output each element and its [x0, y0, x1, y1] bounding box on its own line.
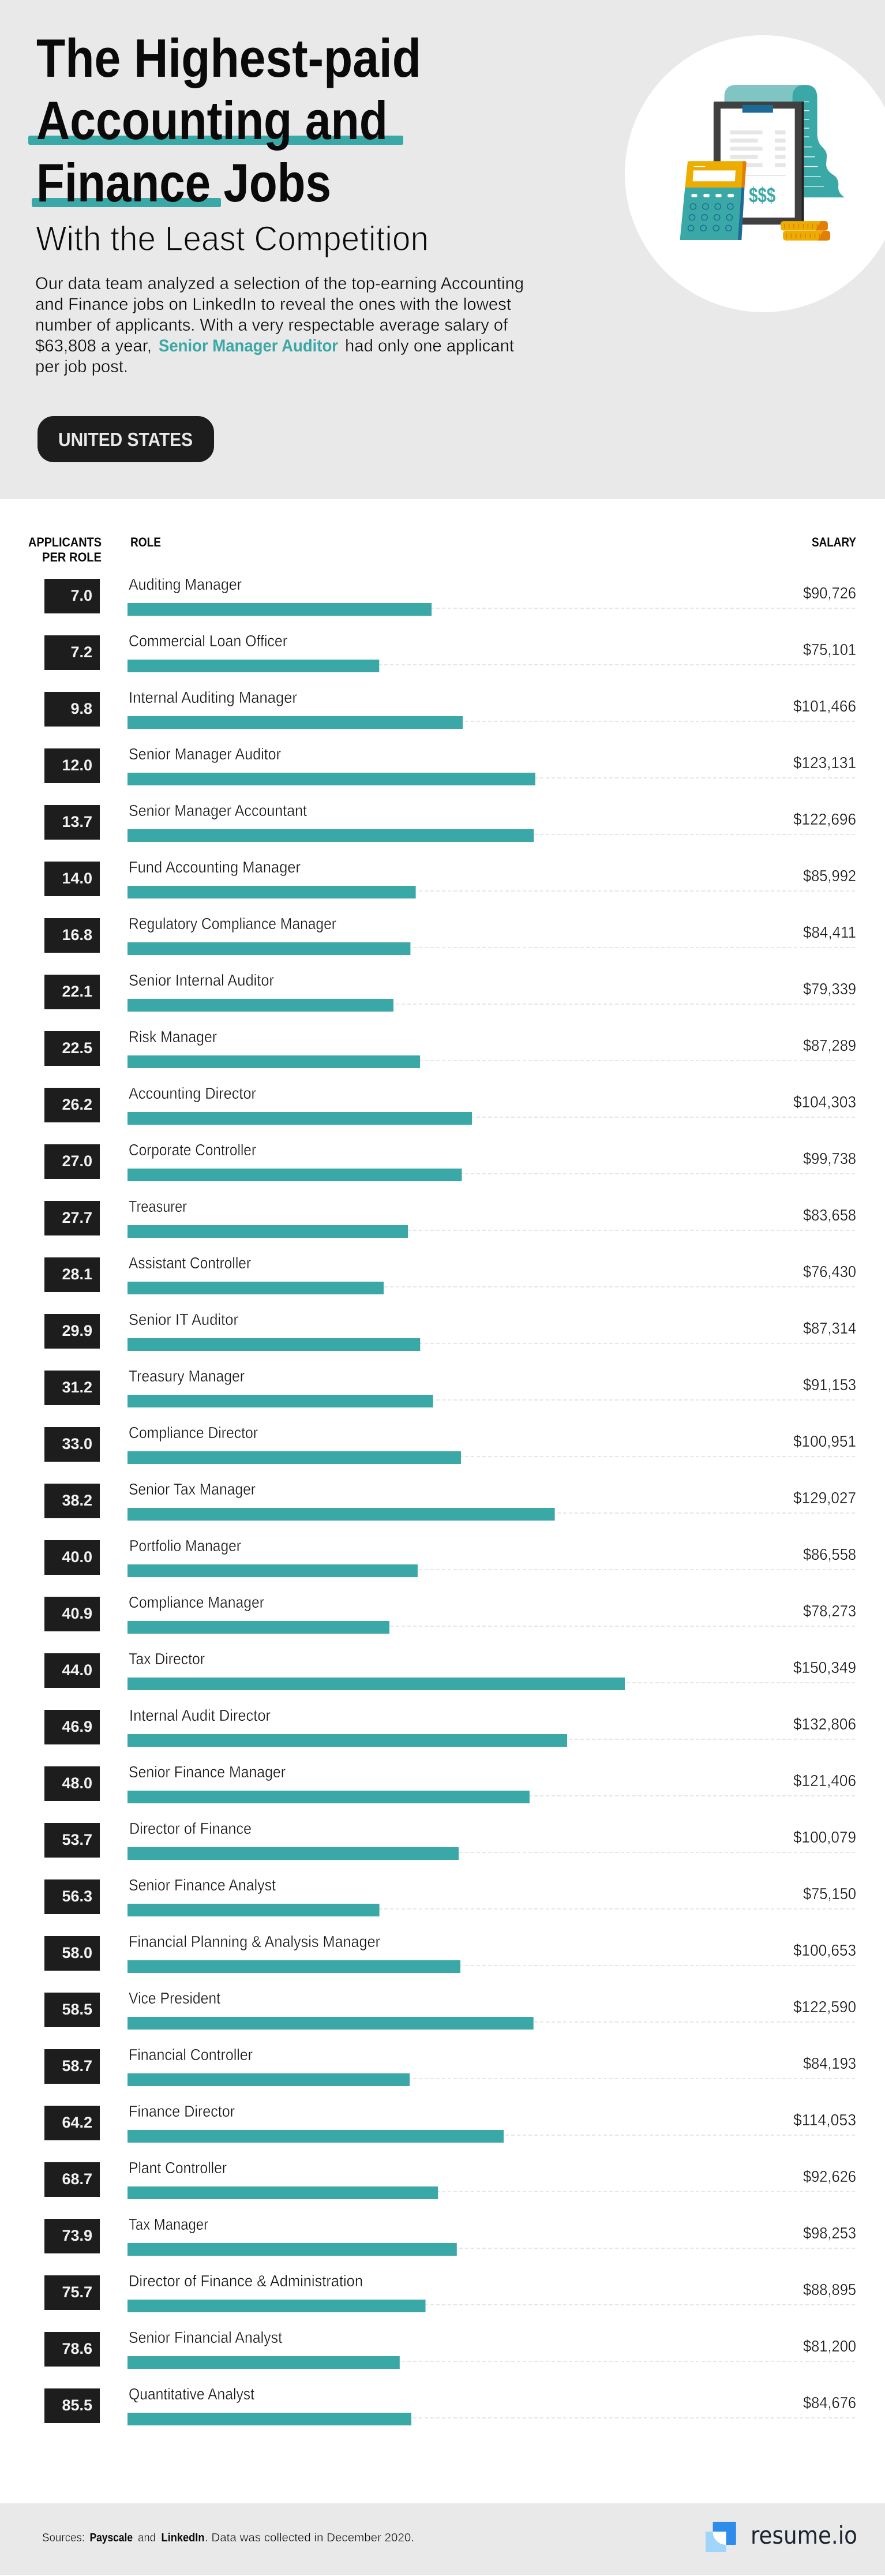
table column headers	[28, 535, 856, 564]
row: Director of Finance & Administration: Director of Finance & Administration	[129, 2272, 363, 2290]
row: Senior Manager Accountant: $122,696	[793, 810, 856, 828]
row: Compliance Manager	[44, 1593, 856, 1634]
sources note: Payscale	[90, 2532, 133, 2544]
table column headers: ROLE	[130, 535, 161, 549]
intro paragraph: and Finance jobs on LinkedIn to reveal the ones with the lowest	[35, 295, 512, 314]
row: Financial Planning & Analysis Manager	[44, 1933, 856, 1973]
row: Regulatory Compliance Manager: 16.8	[62, 926, 92, 943]
logo wordmark: resume.io	[751, 2521, 857, 2549]
row: Financial Planning & Analysis Manager: $100,653	[793, 1941, 856, 1959]
row: Senior Manager Accountant: Senior Manager Accountant	[129, 802, 307, 819]
row: Compliance Director: $100,951	[793, 1432, 856, 1450]
row: Senior IT Auditor: 29.9	[62, 1322, 92, 1339]
row: Treasurer	[44, 1197, 856, 1238]
row: Finance Director: 64.2	[62, 2114, 92, 2131]
row: Tax Director: 44.0	[62, 1661, 92, 1679]
row: Senior Internal Auditor: Senior Internal Auditor	[129, 971, 274, 989]
row: Commercial Loan Officer: Commercial Loan Officer	[129, 632, 287, 650]
sources note: Sources:	[42, 2532, 85, 2544]
table column headers: PER ROLE	[42, 550, 102, 564]
row: Senior Manager Auditor: 12.0	[62, 757, 92, 774]
dashed row separators	[130, 608, 857, 2418]
row: Senior IT Auditor: $87,314	[803, 1319, 856, 1337]
row: Corporate Controller: $99,738	[803, 1150, 856, 1167]
row: Senior Finance Analyst	[44, 1876, 856, 1916]
row: Tax Manager: 73.9	[62, 2227, 92, 2244]
row: Senior Internal Auditor: $79,339	[803, 980, 856, 998]
intro paragraph: Our data team analyzed a selection of the top-earning Accounting	[35, 274, 524, 293]
row: Senior IT Auditor	[44, 1311, 856, 1351]
row: Accounting Director: 26.2	[62, 1096, 92, 1113]
row: Financial Controller: $84,193	[803, 2054, 856, 2072]
row: Accounting Director: Accounting Director	[129, 1084, 256, 1102]
row: Senior Tax Manager: Senior Tax Manager	[129, 1480, 256, 1498]
sources note: LinkedIn	[162, 2532, 204, 2544]
sources note	[42, 2532, 414, 2544]
row: Vice President: 58.5	[62, 2001, 92, 2018]
row: Tax Manager	[44, 2215, 856, 2256]
icon: clipboard, receipt, calculator and coins	[680, 85, 845, 241]
row: Tax Director	[44, 1650, 856, 1690]
row: Treasury Manager: 31.2	[62, 1379, 92, 1396]
row: Senior Manager Auditor: $123,131	[793, 754, 856, 772]
row: Tax Director: Tax Director	[129, 1650, 205, 1668]
table column headers: SALARY	[812, 535, 856, 549]
intro paragraph: Senior Manager Auditor	[159, 336, 338, 355]
row: Tax Manager: Tax Manager	[129, 2215, 208, 2233]
row: Portfolio Manager: 40.0	[62, 1548, 92, 1566]
row: Internal Audit Director	[44, 1706, 856, 1747]
row: Treasury Manager	[44, 1367, 856, 1407]
title	[36, 28, 421, 213]
row: Compliance Manager: Compliance Manager	[129, 1593, 264, 1611]
row: Corporate Controller: 27.0	[62, 1152, 92, 1170]
row: Regulatory Compliance Manager: $84,411	[803, 923, 856, 941]
row: Director of Finance: 53.7	[62, 1831, 92, 1848]
row: Compliance Manager: $78,273	[803, 1602, 856, 1620]
row: Senior Manager Accountant: 13.7	[62, 813, 92, 830]
row: Director of Finance & Administration	[44, 2272, 856, 2312]
row: Regulatory Compliance Manager	[44, 915, 856, 955]
row: Accounting Director	[44, 1084, 856, 1125]
row: Assistant Controller: $76,430	[803, 1263, 856, 1280]
row: Internal Auditing Manager	[44, 688, 856, 729]
header panel	[0, 0, 885, 499]
table column headers: APPLICANTS	[28, 535, 102, 549]
row: Treasurer: Treasurer	[129, 1197, 187, 1215]
row: Plant Controller: 68.7	[62, 2170, 92, 2188]
row: Internal Audit Director: Internal Audit Director	[129, 1706, 271, 1724]
row: Financial Controller: Financial Controller	[129, 2046, 253, 2064]
row: Fund Accounting Manager: $85,992	[803, 867, 856, 885]
title: Finance Jobs	[36, 152, 331, 213]
row: Senior Tax Manager: 38.2	[62, 1492, 92, 1509]
row: Auditing Manager	[44, 575, 856, 616]
row: Internal Auditing Manager: 9.8	[70, 700, 92, 717]
row: Portfolio Manager: $86,558	[803, 1545, 856, 1563]
row: Risk Manager: $87,289	[803, 1036, 856, 1054]
row: Risk Manager: 22.5	[62, 1039, 92, 1057]
row: Quantitative Analyst	[44, 2385, 856, 2425]
row: Senior Internal Auditor: 22.1	[62, 983, 92, 1000]
row: Risk Manager: Risk Manager	[129, 1028, 217, 1046]
row: Director of Finance: Director of Finance	[129, 1819, 252, 1837]
row: Accounting Director: $104,303	[793, 1093, 856, 1111]
row: Senior Finance Analyst: 56.3	[62, 1888, 92, 1905]
row: Director of Finance: $100,079	[793, 1828, 856, 1846]
row: Portfolio Manager	[44, 1537, 856, 1577]
row: Senior Financial Analyst: $81,200	[803, 2337, 856, 2355]
intro paragraph: $63,808 a year,	[35, 336, 152, 355]
row: Finance Director	[44, 2102, 856, 2143]
row: Senior IT Auditor: Senior IT Auditor	[129, 1311, 238, 1328]
row: Plant Controller: Plant Controller	[129, 2159, 227, 2177]
row: Financial Controller: 58.7	[62, 2057, 92, 2075]
row: Senior Financial Analyst	[44, 2328, 856, 2369]
country pill: United States	[38, 416, 214, 462]
row: Financial Planning & Analysis Manager: 58.0	[62, 1944, 92, 1961]
row: Senior Finance Manager	[44, 1763, 856, 1803]
row: Treasury Manager: Treasury Manager	[129, 1367, 245, 1385]
row: Director of Finance & Administration: 75.7	[62, 2283, 92, 2301]
icon: clipboard, receipt, calculator and coins: $$$	[749, 184, 775, 207]
row: Assistant Controller	[44, 1254, 856, 1294]
row: Senior Internal Auditor	[44, 971, 856, 1012]
row: Senior Finance Manager: Senior Finance Manager	[129, 1763, 286, 1781]
row: Auditing Manager: 7.0	[70, 587, 92, 604]
row: Fund Accounting Manager	[44, 858, 856, 898]
row: Senior Tax Manager: $129,027	[793, 1489, 856, 1507]
icon: white circle	[625, 35, 885, 312]
row: Internal Auditing Manager: $101,466	[793, 697, 856, 715]
row: Director of Finance & Administration: $88,895	[803, 2281, 856, 2298]
sources note: . Data was collected in December 2020.	[205, 2532, 414, 2544]
row: Tax Director: $150,349	[793, 1658, 856, 1676]
row: Financial Controller	[44, 2046, 856, 2086]
row: Senior Financial Analyst: Senior Financial Analyst	[129, 2328, 282, 2346]
row: Corporate Controller	[44, 1141, 856, 1181]
row: Commercial Loan Officer	[44, 632, 856, 672]
row: Compliance Director: Compliance Director	[129, 1424, 258, 1441]
row: Finance Director: $114,053	[793, 2111, 856, 2129]
country pill: United States: UNITED STATES	[58, 429, 193, 450]
intro paragraph: number of applicants. With a very respectable average salary of	[35, 316, 508, 335]
intro paragraph: had only one applicant	[345, 336, 515, 355]
subtitle: With the Least Competition	[36, 219, 429, 258]
row: Senior Manager Accountant	[44, 802, 856, 842]
row: Commercial Loan Officer: 7.2	[70, 643, 92, 661]
title: Accounting and	[36, 90, 388, 151]
row: Assistant Controller: 28.1	[62, 1265, 92, 1283]
row: Plant Controller: $92,626	[803, 2167, 856, 2185]
intro paragraph	[35, 274, 524, 376]
row: Vice President: Vice President	[129, 1989, 220, 2007]
row: Quantitative Analyst: $84,676	[803, 2394, 856, 2412]
footer panel	[0, 2503, 885, 2575]
row: Fund Accounting Manager: Fund Accounting Manager	[129, 858, 301, 876]
row: Regulatory Compliance Manager: Regulatory Compliance Manager	[129, 915, 336, 933]
row: Compliance Manager: 40.9	[62, 1605, 92, 1622]
row: Finance Director: Finance Director	[129, 2102, 235, 2120]
highlight: title underlines	[28, 136, 403, 207]
row: Quantitative Analyst: 85.5	[62, 2397, 92, 2414]
row: Fund Accounting Manager: 14.0	[62, 870, 92, 887]
row: Corporate Controller: Corporate Controller	[129, 1141, 256, 1159]
row: Senior Manager Auditor: Senior Manager Auditor	[129, 745, 281, 763]
intro paragraph: per job post.	[35, 357, 128, 376]
row: Auditing Manager: $90,726	[803, 584, 856, 602]
row: Plant Controller	[44, 2159, 856, 2199]
sources note: and	[138, 2532, 156, 2544]
row: Auditing Manager: Auditing Manager	[129, 575, 242, 593]
row: Compliance Director	[44, 1424, 856, 1464]
row: Quantitative Analyst: Quantitative Analyst	[129, 2385, 254, 2403]
row: Senior Finance Analyst: Senior Finance Analyst	[129, 1876, 276, 1894]
row: Director of Finance	[44, 1819, 856, 1860]
row: Treasury Manager: $91,153	[803, 1376, 856, 1394]
row: Treasurer: $83,658	[803, 1206, 856, 1224]
row: Risk Manager	[44, 1028, 856, 1068]
row: Financial Planning & Analysis Manager: Financial Planning & Analysis Manager	[129, 1933, 380, 1950]
row: Treasurer: 27.7	[62, 1209, 92, 1226]
icon: resume.io logo mark	[706, 2522, 736, 2552]
title: The Highest-paid	[36, 28, 421, 88]
row: Senior Tax Manager	[44, 1480, 856, 1521]
row: Portfolio Manager: Portfolio Manager	[129, 1537, 241, 1555]
row: Vice President	[44, 1989, 856, 2030]
row: Commercial Loan Officer: $75,101	[803, 641, 856, 658]
row: Senior Financial Analyst: 78.6	[62, 2340, 92, 2357]
row: Internal Audit Director: $132,806	[793, 1715, 856, 1733]
row: Compliance Director: 33.0	[62, 1435, 92, 1452]
row: Assistant Controller: Assistant Controller	[129, 1254, 251, 1272]
row: Internal Audit Director: 46.9	[62, 1718, 92, 1735]
row: Senior Finance Manager: $121,406	[793, 1772, 856, 1789]
row: Tax Manager: $98,253	[803, 2224, 856, 2242]
row: Senior Manager Auditor	[44, 745, 856, 785]
row: Internal Auditing Manager: Internal Auditing Manager	[129, 688, 297, 706]
row: Vice President: $122,590	[793, 1998, 856, 2016]
row: Senior Finance Analyst: $75,150	[803, 1885, 856, 1903]
row: Senior Finance Manager: 48.0	[62, 1774, 92, 1792]
